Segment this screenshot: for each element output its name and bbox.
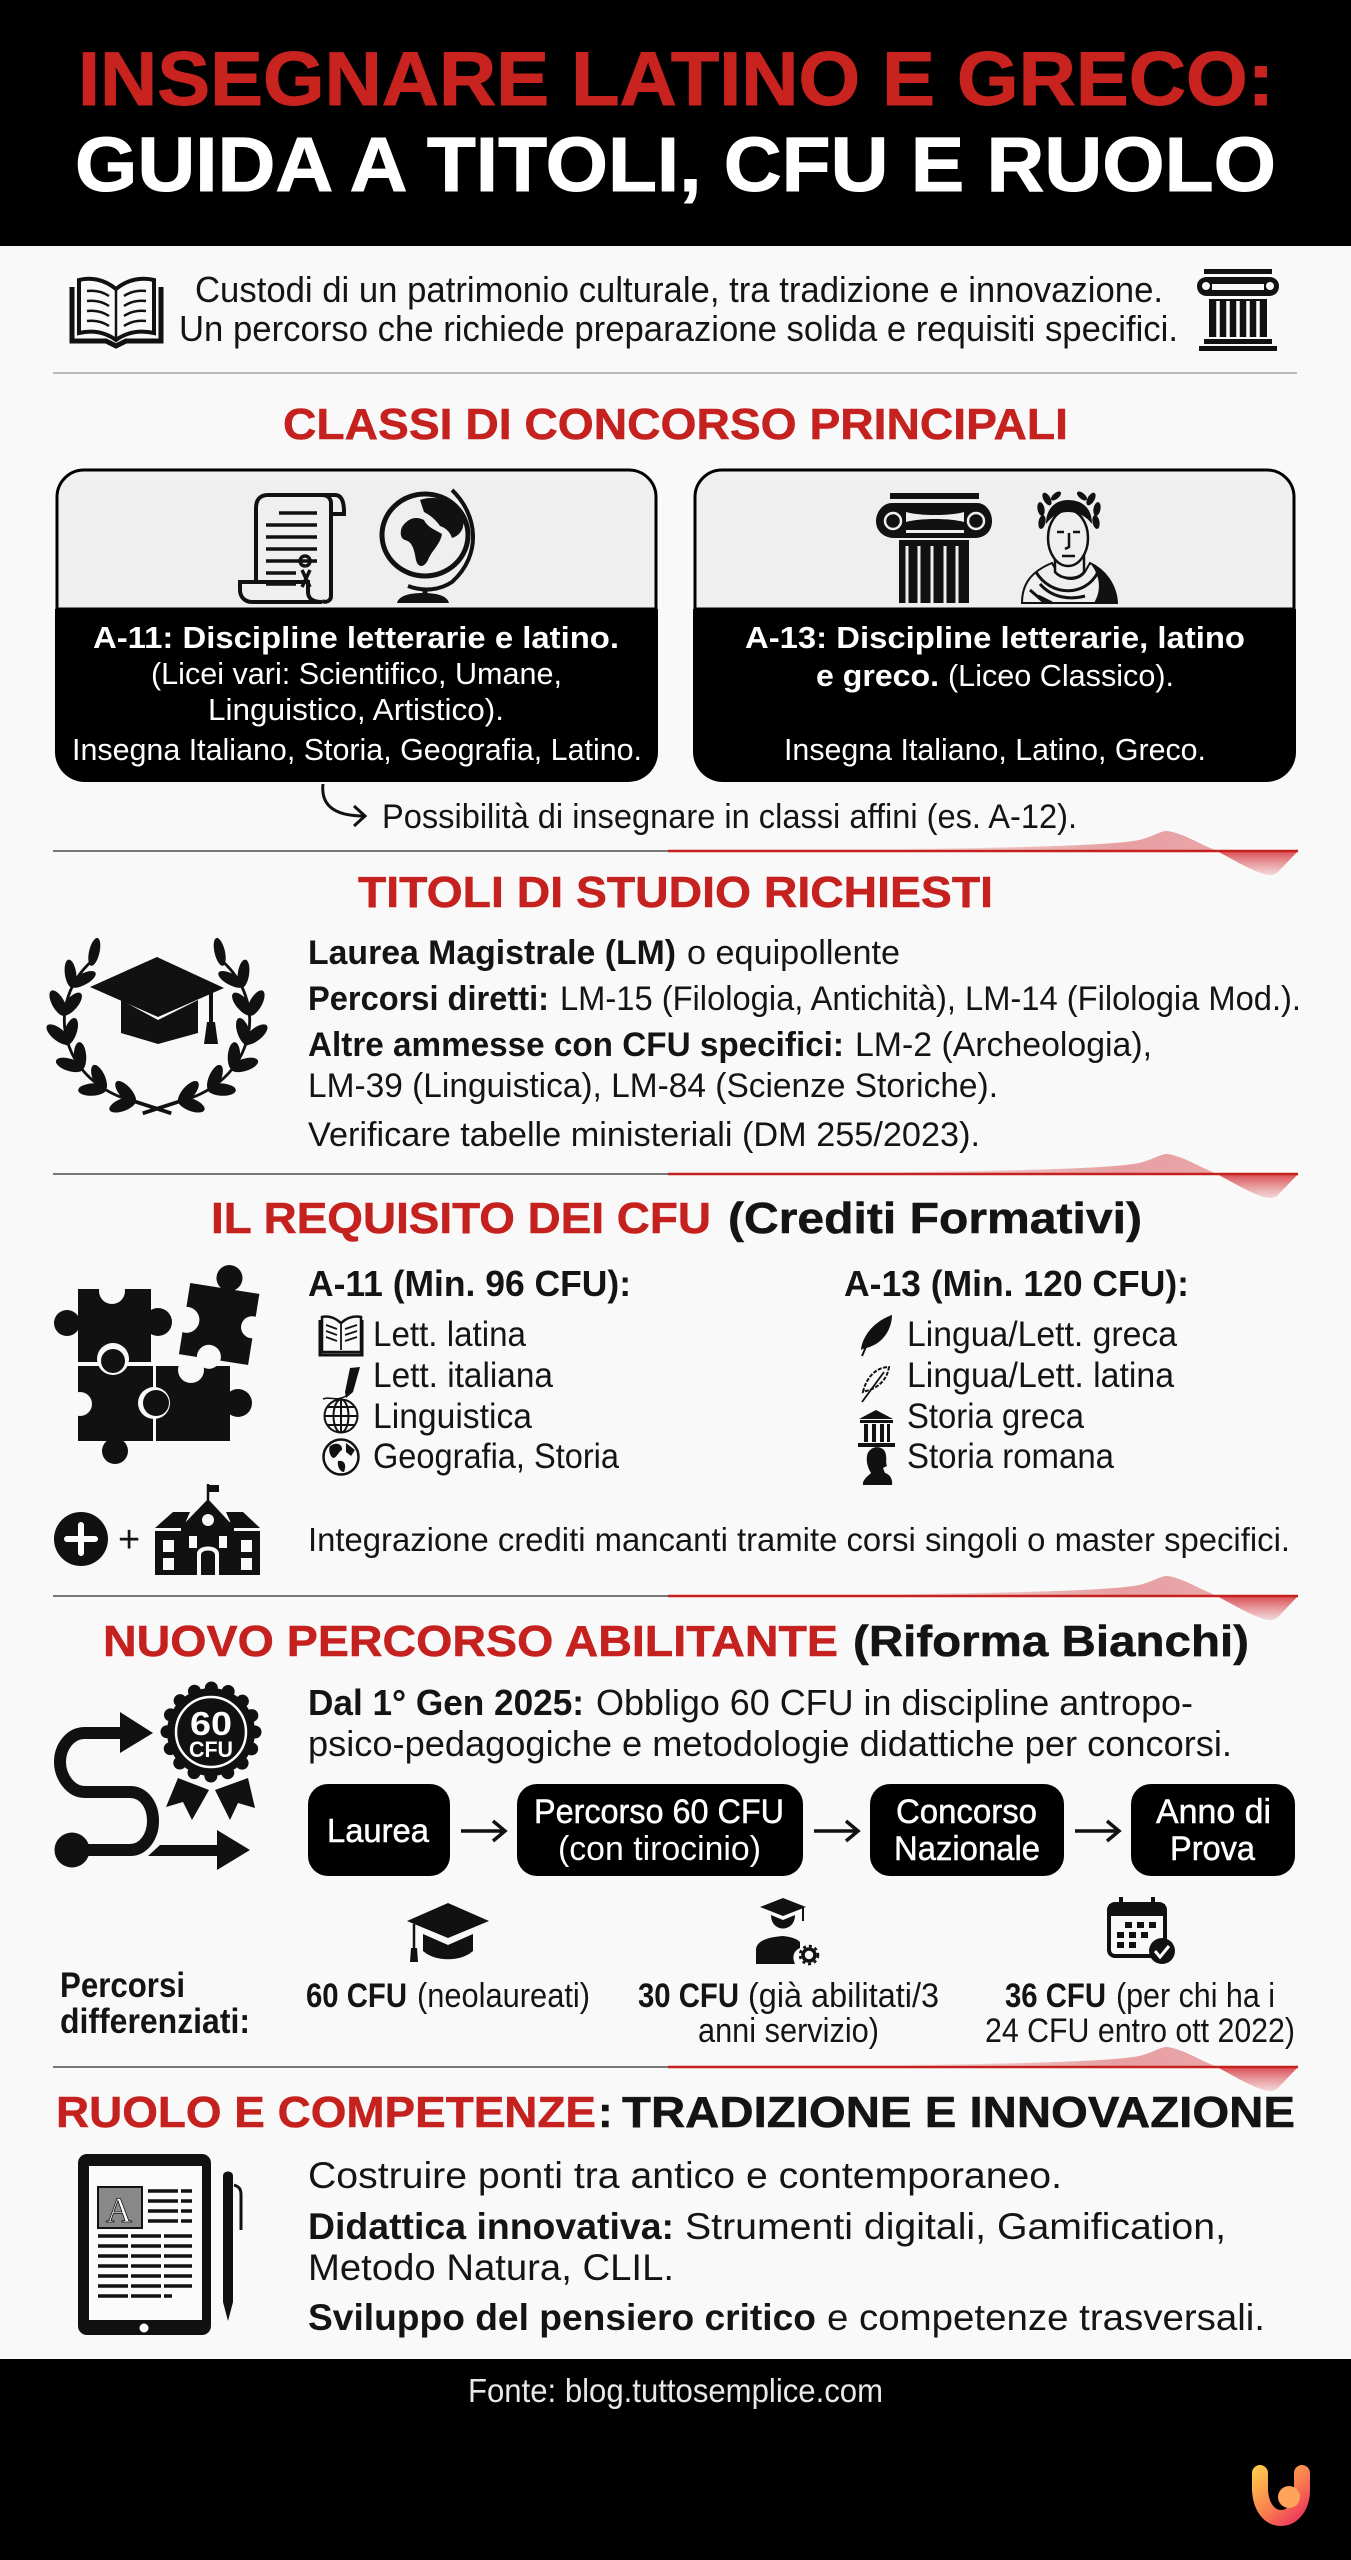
text: dal 1 gennaio 2025: Dal 1° Gen 2025:	[308, 1682, 584, 1723]
text: titoli: LM-39 (Linguistica), LM-84 (Scienze Storiche).	[308, 1067, 998, 1105]
column: A-11: Lett. italiana	[373, 1356, 554, 1395]
intro text: Un percorso che richiede preparazione solida e requisiti specifici.	[179, 308, 1178, 349]
text: ruolo	[308, 2155, 1265, 2338]
path 36 CFU: 24 CFU entro ott 2022)	[985, 2012, 1295, 2050]
path 36 CFU	[985, 1977, 1295, 2050]
icon: mortarboard	[407, 1903, 489, 1962]
note: classi affini: Possibilità di insegnare in classi affini (es. A-12).	[382, 798, 1077, 836]
arrow	[461, 1821, 505, 1841]
icon: quill	[862, 1367, 889, 1402]
step: percorso 60 CFU	[517, 1784, 803, 1876]
text: ruolo: Costruire ponti tra antico e contemporaneo.	[308, 2155, 1062, 2196]
heading: nuovo percorso	[103, 1617, 1249, 1666]
text: titoli: Percorsi diretti:	[308, 980, 549, 1018]
column: A-11: A-11 (Min. 96 CFU):	[308, 1263, 631, 1304]
path 30 CFU: anni servizio)	[698, 2012, 879, 2050]
text: integrazione crediti: Integrazione crediti mancanti tramite corsi singoli o master specifici.	[308, 1521, 1290, 1558]
card text A-11: (Licei vari: Scientifico, Umane,	[151, 656, 562, 691]
path 60 CFU: (neolaureati)	[417, 1977, 590, 2015]
title line 1: INSEGNARE LATINO E GRECO:	[78, 37, 1274, 122]
header band	[0, 0, 1351, 246]
step: anno di prova	[1131, 1784, 1295, 1876]
icon: wire globe	[324, 1399, 358, 1433]
icon: pencil	[323, 1367, 360, 1399]
plus sign: +	[118, 1519, 140, 1561]
path 30 CFU: (già abilitati/3	[748, 1977, 939, 2015]
text: titoli: Verificare tabelle ministeriali (DM 255/2023).	[308, 1116, 980, 1154]
arrow	[814, 1821, 858, 1841]
column: A-13: Lingua/Lett. latina	[907, 1356, 1175, 1395]
text: ruolo: Sviluppo del pensiero critico	[308, 2297, 816, 2338]
intro section	[72, 269, 1279, 351]
text: titoli: LM-15 (Filologia, Antichità), LM-14 (Filologia Mod.).	[560, 980, 1301, 1018]
icon: tablet and pen	[78, 2154, 241, 2335]
icon: graduate with gear	[756, 1898, 818, 1964]
icon: calendar	[1109, 1897, 1175, 1964]
path 36 CFU: 36 CFU	[1005, 1977, 1106, 2015]
icon: globe	[382, 490, 473, 603]
step: laurea: Laurea	[327, 1812, 430, 1849]
step: concorso nazionale: Concorso	[896, 1793, 1037, 1831]
label: percorsi differenziati: differenziati:	[60, 2002, 250, 2041]
card text A-11	[72, 620, 642, 767]
step: concorso nazionale: Nazionale	[894, 1830, 1040, 1868]
text: dal 1 gennaio 2025: psico-pedagogiche e metodologie didattiche per concorsi.	[308, 1723, 1232, 1764]
icon: temple	[858, 1410, 895, 1447]
icon: roman profile	[863, 1447, 892, 1485]
path 30 CFU: 30 CFU	[638, 1977, 739, 2015]
step: concorso nazionale	[870, 1784, 1064, 1876]
text: dal 1 gennaio 2025: Obbligo 60 CFU in discipline antropo-	[596, 1682, 1193, 1723]
heading: requisito CFU: IL REQUISITO DEI CFU	[211, 1194, 711, 1243]
intro text: Custodi di un patrimonio culturale, tra tradizione e innovazione.	[195, 269, 1163, 310]
arrow: classi affini	[323, 784, 365, 826]
icon: path arrows	[54, 1712, 250, 1870]
icon: open book	[72, 279, 161, 346]
logo	[1260, 2473, 1302, 2518]
card text A-13	[745, 620, 1245, 767]
column: A-13: Storia romana	[907, 1437, 1115, 1476]
heading: requisito CFU	[211, 1194, 1142, 1243]
column: A-11: Geografia, Storia	[373, 1437, 619, 1476]
text: ruolo: Metodo Natura, CLIL.	[308, 2247, 674, 2288]
heading: requisito CFU: (Crediti Formativi)	[728, 1194, 1142, 1243]
step: percorso 60 CFU: (con tirocinio)	[558, 1830, 761, 1868]
step: laurea	[308, 1784, 450, 1876]
icon: tablet and pen: A	[106, 2190, 132, 2230]
text: ruolo: Didattica innovativa:	[308, 2206, 674, 2247]
text: titoli: LM-2 (Archeologia),	[855, 1026, 1152, 1064]
footer band	[0, 2359, 1351, 2560]
icon: scroll	[240, 495, 344, 602]
heading: ruolo e competenze: :	[598, 2088, 613, 2137]
step: anno di prova: Prova	[1170, 1830, 1255, 1868]
column: A-13	[844, 1263, 1189, 1485]
icon: graduation cap with laurel	[43, 937, 271, 1116]
step: percorso 60 CFU: Percorso 60 CFU	[534, 1793, 784, 1831]
icon: feather	[861, 1315, 892, 1356]
icon: school	[155, 1484, 260, 1575]
text: titoli: Altre ammesse con CFU specifici:	[308, 1026, 844, 1064]
icon: column	[1197, 269, 1279, 351]
icon: plus in circle	[54, 1512, 108, 1566]
heading: nuovo percorso: (Riforma Bianchi)	[853, 1617, 1249, 1666]
source: Fonte: blog.tuttosemplice.com	[468, 2372, 883, 2409]
column: A-13: Lingua/Lett. greca	[907, 1315, 1178, 1354]
path 60 CFU: 60 CFU	[306, 1977, 407, 2015]
title line 2: GUIDA A TITOLI, CFU E RUOLO	[75, 122, 1276, 208]
heading: ruolo e competenze: TRADIZIONE E INNOVAZIONE	[622, 2088, 1295, 2137]
card text A-13: A-13: Discipline letterarie, latino	[745, 620, 1245, 655]
icon: small book	[320, 1317, 362, 1355]
card text A-13: e greco.	[816, 658, 939, 693]
icon: earth	[324, 1440, 358, 1474]
column: A-13: A-13 (Min. 120 CFU):	[844, 1263, 1189, 1304]
heading: nuovo percorso: NUOVO PERCORSO ABILITANTE	[103, 1617, 838, 1666]
text: dal 1 gennaio 2025	[308, 1682, 1232, 1764]
card text A-11: Insegna Italiano, Storia, Geografia, Latino.	[72, 732, 642, 767]
text: ruolo: e competenze trasversali.	[827, 2297, 1265, 2338]
card text A-11: A-11: Discipline letterarie e latino.	[93, 620, 619, 655]
label: percorsi differenziati: Percorsi	[60, 1966, 185, 2005]
heading: ruolo e competenze	[56, 2088, 1295, 2137]
step: anno di prova: Anno di	[1156, 1793, 1271, 1831]
icon: 60 CFU badge: 60	[190, 1705, 232, 1742]
card text A-11: Linguistico, Artistico).	[208, 692, 504, 727]
path 36 CFU: (per chi ha i	[1116, 1977, 1275, 2015]
intro text	[179, 269, 1178, 349]
panel: A-11	[55, 470, 658, 782]
icon: 60 CFU badge: CFU	[189, 1737, 233, 1762]
card text A-13: Insegna Italiano, Latino, Greco.	[784, 732, 1206, 767]
arrow	[1075, 1821, 1119, 1841]
icon: 60 CFU badge	[159, 1680, 263, 1820]
text: ruolo: Strumenti digitali, Gamification,	[685, 2206, 1226, 2247]
path 30 CFU	[638, 1977, 939, 2050]
heading: ruolo e competenze: RUOLO E COMPETENZE	[56, 2088, 596, 2137]
panel: A-13	[693, 470, 1296, 782]
column: A-11: Linguistica	[373, 1397, 533, 1436]
column: A-13: Storia greca	[907, 1397, 1084, 1436]
icon: puzzle	[54, 1258, 272, 1464]
icon: ionic column	[876, 493, 992, 603]
text: titoli	[308, 934, 1301, 1154]
path 60 CFU	[306, 1977, 590, 2015]
flow: percorso	[308, 1784, 1295, 1876]
heading: titoli di studio: TITOLI DI STUDIO RICHIESTI	[358, 868, 993, 917]
card text A-13: (Liceo Classico).	[948, 658, 1174, 693]
heading: classi di concorso: CLASSI DI CONCORSO PRINCIPALI	[283, 400, 1068, 449]
column: A-11: Lett. latina	[373, 1315, 527, 1354]
text: titoli: Laurea Magistrale (LM)	[308, 934, 676, 972]
text: titoli: o equipollente	[687, 934, 900, 972]
icon: roman bust	[1022, 490, 1117, 603]
label: percorsi differenziati	[60, 1966, 250, 2041]
column: A-11	[308, 1263, 631, 1476]
